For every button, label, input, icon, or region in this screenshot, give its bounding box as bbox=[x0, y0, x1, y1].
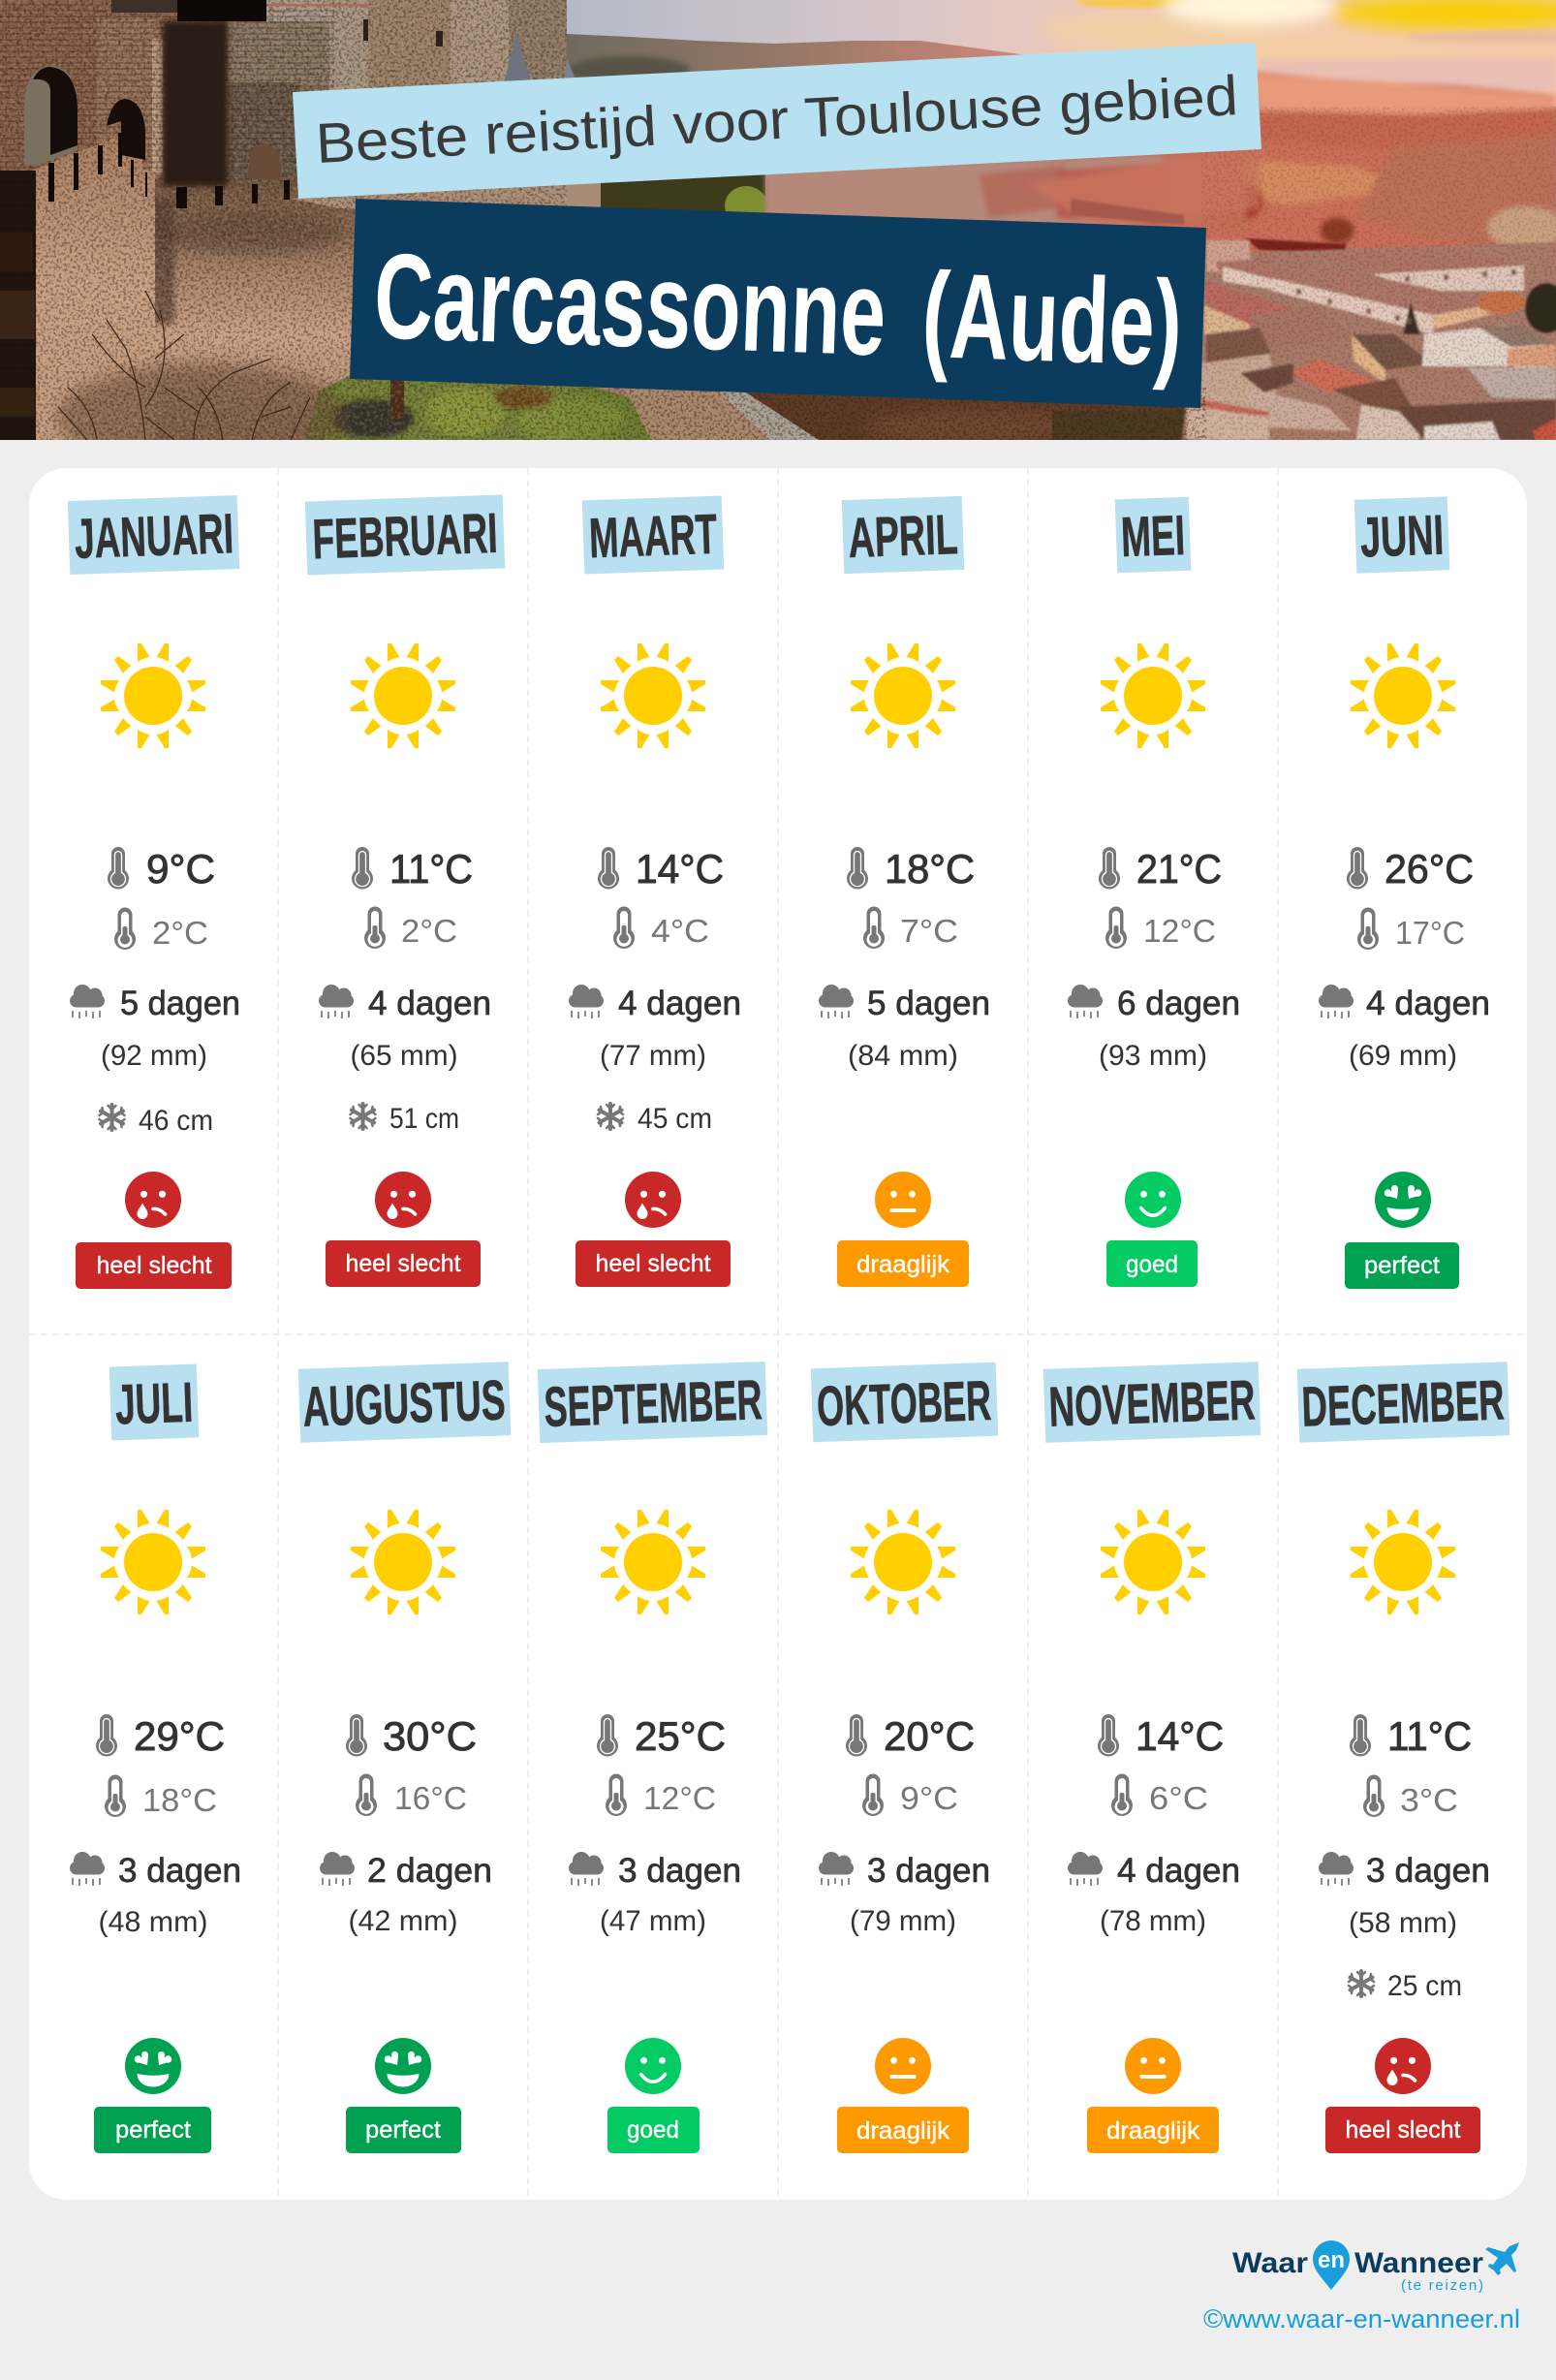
subtitle banner bbox=[293, 43, 1261, 199]
max temperature bbox=[1098, 1713, 1224, 1759]
min temperature bbox=[364, 907, 457, 949]
heading: NOVEMBER bbox=[1047, 1368, 1257, 1439]
snow: 25 cm bbox=[1387, 1970, 1462, 2002]
hazy red landscape bbox=[1056, 69, 1556, 254]
rating bbox=[1106, 1172, 1198, 1287]
title banner bbox=[350, 199, 1206, 408]
snow bbox=[598, 1103, 712, 1135]
snow bbox=[351, 1103, 459, 1135]
website url: ©www.waar-en-wanneer.nl bbox=[1203, 2304, 1520, 2333]
rating bbox=[94, 2038, 211, 2153]
heading: AUGUSTUS bbox=[301, 1368, 507, 1439]
month: maart bbox=[569, 496, 741, 1287]
min temperature: 3°C bbox=[1400, 1782, 1458, 1818]
rainfall: (93 mm) bbox=[1099, 1040, 1207, 1072]
rating bbox=[1345, 1172, 1459, 1289]
heading bbox=[68, 495, 239, 575]
rain days: 3 dagen bbox=[118, 1852, 241, 1890]
max temperature bbox=[108, 846, 215, 892]
max temperature: 20°C bbox=[884, 1713, 975, 1759]
rating: draaglijk bbox=[1106, 2117, 1200, 2145]
rain days: 3 dagen bbox=[867, 1852, 990, 1890]
icon: sun bbox=[851, 1510, 955, 1614]
heading bbox=[1043, 1362, 1260, 1443]
month: november bbox=[1043, 1362, 1260, 2153]
min temperature bbox=[862, 1773, 958, 1816]
max temperature: 11°C bbox=[389, 846, 473, 892]
min temperature: 18°C bbox=[142, 1782, 217, 1818]
photo grain bbox=[0, 0, 567, 440]
max temperature bbox=[1350, 1713, 1472, 1759]
castle walls bbox=[0, 0, 228, 180]
heading: FEBRUARI bbox=[311, 502, 499, 571]
heading bbox=[842, 496, 964, 574]
min temperature: 7°C bbox=[900, 913, 958, 949]
rating: goed bbox=[627, 2116, 679, 2144]
snow: 45 cm bbox=[638, 1103, 712, 1135]
rain days: 3 dagen bbox=[618, 1852, 741, 1890]
icon: sun bbox=[1351, 643, 1455, 748]
min temperature: 6°C bbox=[1149, 1780, 1208, 1816]
icon: sun bbox=[101, 643, 205, 748]
heading bbox=[305, 494, 505, 576]
rating: heel slecht bbox=[345, 1250, 461, 1277]
icon: sun bbox=[601, 643, 705, 748]
max temperature: 26°C bbox=[1385, 846, 1474, 892]
rating bbox=[1087, 2038, 1219, 2153]
max temperature bbox=[1099, 846, 1222, 892]
min temperature: 17°C bbox=[1395, 915, 1465, 951]
strip between banners bbox=[291, 183, 601, 209]
rating bbox=[576, 1172, 731, 1287]
min temperature: 9°C bbox=[900, 1780, 958, 1816]
icon: sun bbox=[351, 1510, 455, 1614]
rating: draaglijk bbox=[856, 2117, 950, 2145]
max temperature bbox=[598, 846, 724, 892]
rain days: 3 dagen bbox=[1366, 1852, 1490, 1890]
min temperature bbox=[105, 1775, 217, 1818]
heading: OKTOBER bbox=[816, 1369, 992, 1438]
snow: 46 cm bbox=[139, 1105, 213, 1137]
icon: sun bbox=[1351, 1510, 1455, 1614]
min temperature: 4°C bbox=[651, 913, 709, 949]
month: januari bbox=[68, 495, 240, 1289]
min temperature: 12°C bbox=[643, 1780, 716, 1816]
min temperature bbox=[613, 907, 709, 949]
heading bbox=[538, 1362, 767, 1443]
heading bbox=[298, 1362, 511, 1443]
rating bbox=[76, 1172, 232, 1289]
rainfall: (79 mm) bbox=[850, 1905, 956, 1937]
rating: perfect bbox=[365, 2116, 441, 2144]
rating: perfect bbox=[115, 2116, 191, 2144]
min temperature bbox=[1357, 907, 1465, 951]
rating bbox=[607, 2038, 700, 2153]
month: december bbox=[1297, 1362, 1509, 2153]
rating: heel slecht bbox=[97, 1252, 212, 1279]
rainfall: (69 mm) bbox=[1349, 1040, 1457, 1072]
max temperature: 25°C bbox=[635, 1713, 726, 1759]
rainfall: (92 mm) bbox=[101, 1040, 207, 1072]
snow bbox=[1349, 1970, 1462, 2002]
max temperature: 11°C bbox=[1387, 1713, 1472, 1759]
max temperature: 21°C bbox=[1136, 846, 1222, 892]
rainfall: (77 mm) bbox=[600, 1040, 706, 1072]
max temperature: 14°C bbox=[1136, 1713, 1224, 1759]
castle dark details over grain bbox=[163, 21, 228, 186]
heading bbox=[1115, 497, 1191, 573]
snow bbox=[99, 1105, 213, 1137]
month: juni bbox=[1319, 496, 1490, 1289]
rain days: 5 dagen bbox=[867, 985, 990, 1022]
min temperature bbox=[114, 907, 208, 951]
icon: sun bbox=[601, 1510, 705, 1614]
max temperature bbox=[352, 846, 473, 892]
rating: goed bbox=[1126, 1251, 1178, 1278]
month: mei bbox=[1068, 497, 1240, 1287]
max temperature: 30°C bbox=[383, 1713, 477, 1759]
heading: SEPTEMBER bbox=[543, 1368, 763, 1439]
rain days: 4 dagen bbox=[618, 985, 741, 1022]
min temperature bbox=[356, 1773, 467, 1816]
icon: airplane bbox=[1485, 2242, 1519, 2275]
snow: 51 cm bbox=[389, 1103, 459, 1135]
rain days: 2 dagen bbox=[367, 1852, 492, 1890]
heading: MAART bbox=[588, 503, 718, 570]
rainfall: (78 mm) bbox=[1100, 1905, 1206, 1937]
rating bbox=[326, 1172, 481, 1287]
max temperature: 14°C bbox=[636, 846, 724, 892]
icon: map pin: en bbox=[1318, 2247, 1345, 2273]
max temperature: 29°C bbox=[134, 1713, 225, 1759]
min temperature bbox=[1111, 1773, 1208, 1816]
village bbox=[1071, 199, 1556, 440]
rating bbox=[837, 2038, 969, 2153]
heading: JUNI bbox=[1359, 504, 1445, 569]
min temperature bbox=[863, 907, 958, 949]
max temperature bbox=[1347, 846, 1474, 892]
logo: Waar en Wanneer: Wanneer bbox=[1354, 2247, 1483, 2279]
logo: Waar en Wanneer: (te reizen) bbox=[1401, 2277, 1483, 2294]
rating: heel slecht bbox=[1345, 2116, 1461, 2144]
heading bbox=[109, 1363, 199, 1441]
rainfall: (48 mm) bbox=[99, 1906, 207, 1938]
rain days: 6 dagen bbox=[1117, 985, 1240, 1022]
rainfall: (65 mm) bbox=[351, 1040, 457, 1072]
logo: Waar en Wanneer bbox=[1232, 2240, 1519, 2294]
title text: (Aude) bbox=[920, 248, 1184, 391]
icon: sun bbox=[1101, 1510, 1205, 1614]
rating: perfect bbox=[1364, 1252, 1440, 1279]
green grass bbox=[305, 376, 651, 440]
min temperature: 2°C bbox=[152, 915, 208, 951]
heading: APRIL bbox=[847, 503, 959, 570]
heading bbox=[1354, 496, 1449, 574]
min temperature: 16°C bbox=[394, 1780, 467, 1816]
rain days: 4 dagen bbox=[1366, 985, 1490, 1022]
min temperature bbox=[1105, 907, 1216, 949]
month: april bbox=[819, 496, 990, 1287]
rainfall: (58 mm) bbox=[1349, 1907, 1457, 1939]
month: februari bbox=[305, 494, 505, 1287]
heading: MEI bbox=[1120, 504, 1186, 569]
heading: JULI bbox=[114, 1371, 194, 1436]
month: oktober bbox=[811, 1362, 998, 2153]
rain days: 4 dagen bbox=[368, 985, 491, 1022]
rating: draaglijk bbox=[856, 1251, 950, 1278]
subtitle text: Beste reistijd voor Toulouse gebied bbox=[314, 64, 1239, 175]
max temperature: 9°C bbox=[146, 846, 215, 892]
icon: sun bbox=[851, 643, 955, 748]
title text: Carcassonne bbox=[372, 229, 888, 381]
header photo: Carcassonne at sunset bbox=[0, 0, 1556, 470]
rain days: 4 dagen bbox=[1117, 1852, 1240, 1890]
logo: Waar en Wanneer: Waar bbox=[1232, 2247, 1308, 2279]
icon: sun bbox=[101, 1510, 205, 1614]
max temperature bbox=[346, 1713, 477, 1759]
rating bbox=[837, 1172, 969, 1287]
rating bbox=[346, 2038, 461, 2153]
heading: JANUARI bbox=[74, 502, 234, 571]
rating: heel slecht bbox=[595, 1250, 711, 1277]
icon: sun bbox=[351, 643, 455, 748]
min temperature: 12°C bbox=[1143, 913, 1216, 949]
max temperature: 18°C bbox=[885, 846, 975, 892]
distant hills bbox=[567, 34, 1023, 78]
month: augustus bbox=[298, 1362, 511, 2153]
rainfall: (47 mm) bbox=[600, 1905, 706, 1937]
rating bbox=[1325, 2038, 1480, 2153]
min temperature: 2°C bbox=[401, 913, 457, 949]
heading bbox=[582, 496, 724, 574]
min temperature bbox=[1363, 1775, 1458, 1818]
rain days: 5 dagen bbox=[120, 985, 240, 1022]
min temperature bbox=[606, 1773, 716, 1816]
rain days bbox=[70, 985, 240, 1022]
heading bbox=[811, 1362, 998, 1442]
icon: map pin bbox=[1313, 2240, 1350, 2290]
rainfall: (42 mm) bbox=[349, 1905, 457, 1937]
white calendar panel bbox=[29, 468, 1527, 2200]
rainfall: (84 mm) bbox=[848, 1040, 958, 1072]
ground bbox=[620, 388, 765, 440]
month: juli bbox=[70, 1363, 241, 2153]
icon: sun bbox=[1101, 643, 1205, 748]
month: september bbox=[538, 1362, 767, 2153]
